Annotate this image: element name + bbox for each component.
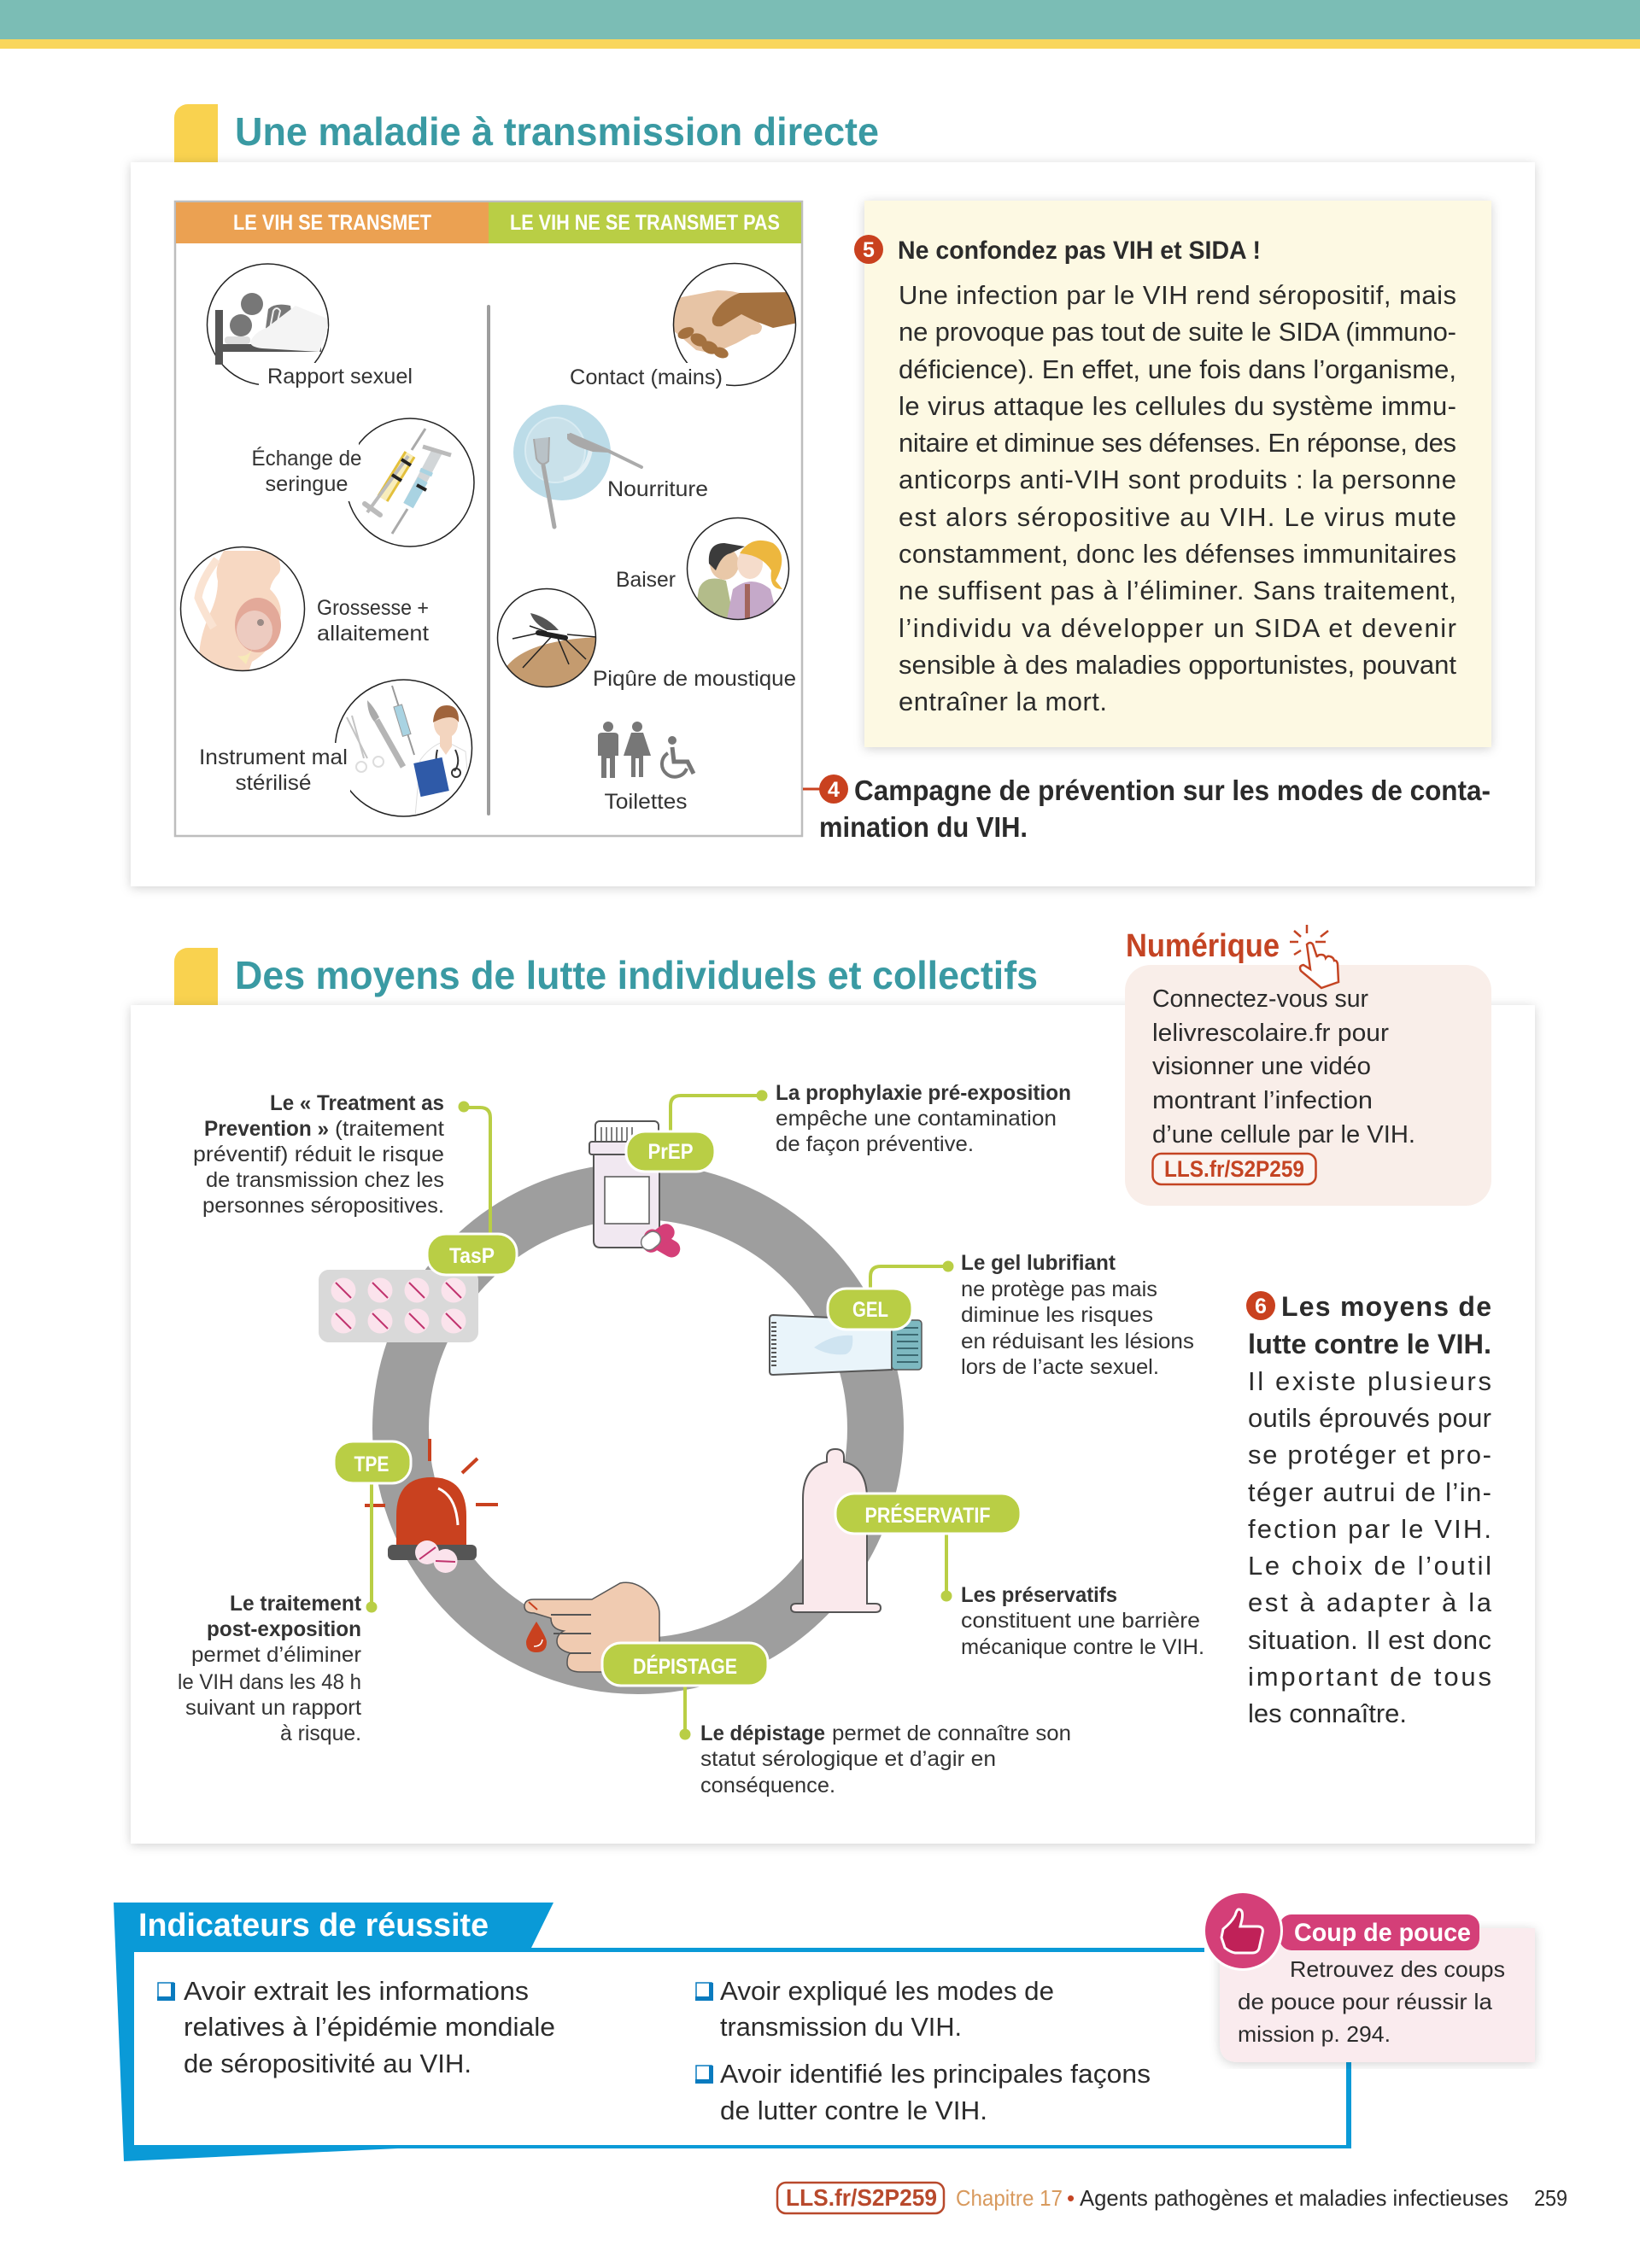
numérique text: montrant l’infection — [1152, 1087, 1373, 1114]
text: Treatment as Prevention: Le « Treatment as — [270, 1091, 444, 1115]
caption: document 4: 4 — [828, 778, 840, 802]
coup de pouce text: mission p. 294. — [1238, 2021, 1391, 2047]
icon: gyrophare TPE — [365, 1439, 498, 1573]
text: Treatment as Prevention — [193, 1091, 444, 1218]
caption: document 4 — [803, 775, 1491, 843]
item: échange de seringue: seringue — [265, 472, 348, 496]
icon: pouce levé — [1203, 1891, 1283, 1971]
checklist: colonne droite: transmission du VIH. — [720, 2012, 962, 2042]
section tab: moyens de lutte — [174, 948, 218, 1006]
text: traitement post-exposition: à risque. — [280, 1721, 361, 1745]
caption: document 4: Campagne de prévention sur les modes de conta- — [854, 775, 1491, 806]
section tab: transmission — [174, 104, 218, 162]
checklist: colonne droite: de lutter contre le VIH. — [720, 2096, 987, 2125]
icon: tube de gel — [770, 1315, 922, 1375]
callout body text: le virus attaque les cellules du système immu- — [899, 391, 1456, 421]
column header: le VIH se transmet: LE VIH SE TRANSMET — [233, 211, 431, 235]
numérique text: lelivrescolaire.fr pour — [1152, 1020, 1389, 1047]
text: traitement post-exposition: le VIH dans les 48 h — [178, 1670, 361, 1694]
icon: flacon PrEP — [589, 1121, 683, 1260]
text: gel lubrifiant: diminue les risques — [961, 1303, 1153, 1327]
heading: Numérique: Numérique — [1126, 928, 1280, 964]
text: Treatment as Prevention: de transmission chez les — [206, 1168, 444, 1192]
item: rapport sexuel: Rapport sexuel — [267, 365, 413, 389]
numérique text: Connectez-vous sur — [1152, 985, 1368, 1013]
text: prophylaxie pré-exposition: La prophylaxie pré-exposition — [776, 1081, 1071, 1105]
text: gel lubrifiant: lors de l’acte sexuel. — [961, 1355, 1159, 1379]
callout body text: l’individu va développer un SIDA et devenir — [899, 613, 1456, 643]
caption: document 6: téger autrui de l’in- — [1248, 1477, 1491, 1507]
callout: coup de pouce — [1203, 1891, 1535, 2062]
item: échange de seringue — [248, 418, 474, 547]
footer: • — [1067, 2185, 1075, 2211]
checklist: colonne droite — [695, 1976, 1151, 2125]
coup de pouce text — [1238, 1956, 1505, 2047]
text: prophylaxie pré-exposition — [776, 1081, 1071, 1156]
label: DÉPISTAGE: DÉPISTAGE — [633, 1654, 737, 1679]
callout body text: entraîner la mort. — [899, 687, 1107, 716]
label: PrEP — [626, 1090, 767, 1172]
callout body text: anticorps anti-VIH sont produits : la personne — [899, 465, 1456, 494]
checklist: colonne gauche — [157, 1976, 555, 2078]
callout: ne confondez pas VIH et SIDA — [854, 201, 1491, 747]
item: contact mains: Contact (mains) — [570, 365, 723, 389]
caption: document 6: se protéger et pro- — [1248, 1440, 1491, 1470]
footer: LLS.fr/S2P259 — [786, 2184, 937, 2211]
coup de pouce text: de pouce pour réussir la — [1238, 1989, 1493, 2014]
label: TasP: TasP — [449, 1244, 495, 1268]
caption: document 4: mination du VIH. — [819, 811, 1028, 843]
label: TPE: TPE — [354, 1453, 390, 1476]
footer — [777, 2183, 1567, 2213]
icon: plaquette de comprimés — [319, 1270, 478, 1342]
text: Treatment as Prevention: (traitement — [335, 1117, 444, 1141]
ring diagram — [319, 1090, 1021, 1740]
column header: le VIH se transmet — [176, 202, 489, 243]
label: TasP — [427, 1102, 517, 1275]
item: rapport sexuel — [207, 264, 421, 390]
text: traitement post-exposition: permet d’éliminer — [191, 1643, 361, 1667]
label pill: Coup de pouce — [1294, 1919, 1471, 1947]
text: gel lubrifiant: en réduisant les lésions — [961, 1330, 1194, 1353]
link badge: LLS.fr/S2P259 — [1164, 1156, 1304, 1182]
callout heading: Ne confondez pas VIH et SIDA ! — [898, 237, 1261, 265]
caption: document 6: Les moyens de — [1281, 1291, 1491, 1322]
numérique text: d’une cellule par le VIH. — [1152, 1121, 1415, 1149]
label: GEL — [828, 1260, 953, 1330]
numérique text: visionner une vidéo — [1152, 1053, 1371, 1080]
caption: document 6: Le choix de l’outil — [1248, 1551, 1491, 1581]
text: dépistage: conséquence. — [700, 1774, 835, 1797]
callout body text: déficience). En effet, une fois dans l’organisme, — [899, 354, 1456, 384]
caption: document 6: situation. Il est donc — [1248, 1625, 1491, 1655]
footer: Agents pathogènes et maladies infectieuses — [1080, 2185, 1508, 2211]
text: dépistage: statut sérologique et d’agir en — [700, 1747, 996, 1771]
callout body text: ne suffisent pas à l’éliminer. Sans traitement, — [899, 576, 1456, 605]
coup de pouce text: Retrouvez des coups — [1290, 1956, 1505, 1982]
text: dépistage: permet de connaître son — [832, 1721, 1071, 1745]
item: toilettes — [598, 722, 694, 814]
item: piqûre de moustique: Piqûre de moustique — [593, 667, 796, 691]
label: PRÉSERVATIF — [835, 1493, 1021, 1602]
item: instrument mal stérilisé: Instrument mal — [199, 745, 348, 769]
item: instrument mal stérilisé — [196, 680, 472, 816]
checklist: colonne droite: Avoir identifié les principales façons — [720, 2059, 1151, 2089]
checklist: colonne droite: Avoir expliqué les modes de — [720, 1976, 1054, 2006]
text: gel lubrifiant: Le gel lubrifiant — [961, 1251, 1116, 1275]
label: GEL: GEL — [852, 1298, 888, 1322]
text: traitement post-exposition: post-exposition — [207, 1617, 361, 1641]
item: toilettes: Toilettes — [605, 790, 687, 814]
icon: main et goutte de sang — [524, 1582, 659, 1672]
label: TPE — [334, 1441, 411, 1612]
text: dépistage — [700, 1721, 1071, 1797]
panel: indicateurs de réussite — [114, 1903, 1351, 2161]
text: traitement post-exposition — [178, 1592, 362, 1745]
item: baiser: Baiser — [616, 568, 676, 592]
numérique text — [1152, 985, 1415, 1149]
text: gel lubrifiant: ne protège pas mais — [961, 1277, 1157, 1301]
text: Treatment as Prevention: Prevention » — [204, 1117, 329, 1141]
heading: Une maladie à transmission directe: Une maladie à transmission directe — [235, 109, 879, 154]
callout: Numérique — [1125, 925, 1491, 1206]
caption: document 6: 6 — [1255, 1295, 1267, 1318]
column header: le VIH ne se transmet pas: LE VIH NE SE TRANSMET PAS — [510, 211, 780, 235]
footer: Chapitre 17 — [956, 2185, 1063, 2211]
item: contact mains — [564, 263, 798, 390]
item: baiser — [616, 517, 789, 623]
item: échange de seringue: Échange de — [251, 446, 362, 471]
caption: document 6: est à adapter à la — [1248, 1587, 1492, 1617]
text: préservatifs: constituent une barrière — [961, 1609, 1200, 1633]
caption: document 6: Il existe plusieurs — [1248, 1366, 1491, 1396]
text: traitement post-exposition: Le traitement — [230, 1592, 362, 1616]
text: dépistage: Le dépistage — [700, 1721, 825, 1745]
caption: document 6: les connaître. — [1248, 1698, 1407, 1728]
caption: document 6: outils éprouvés pour — [1248, 1403, 1491, 1433]
item: nourriture: Nourriture — [607, 477, 708, 501]
callout body text: nitaire et diminue ses défenses. En réponse, des — [899, 428, 1456, 458]
label: PrEP: PrEP — [647, 1140, 694, 1164]
heading: indicateurs: Indicateurs de réussite — [138, 1908, 489, 1944]
text: préservatifs: mécanique contre le VIH. — [961, 1635, 1204, 1659]
item: instrument mal stérilisé: stérilisé — [236, 771, 311, 795]
text: prophylaxie pré-exposition: empêche une contamination — [776, 1107, 1057, 1131]
heading: Des moyens de lutte: Des moyens de lutte individuels et collectifs — [235, 953, 1038, 997]
checklist: colonne gauche: de séropositivité au VIH. — [184, 2049, 472, 2078]
caption: document 6: important de tous — [1248, 1662, 1491, 1692]
icon: main qui clique — [1290, 925, 1338, 988]
number badge 5 — [854, 235, 883, 264]
item: grossesse et allaitement — [181, 547, 429, 675]
item: grossesse et allaitement: allaitement — [317, 622, 429, 646]
item: nourriture — [513, 405, 708, 527]
label: DÉPISTAGE — [602, 1643, 768, 1740]
column header: le VIH ne se transmet pas — [489, 202, 801, 243]
label: PRÉSERVATIF: PRÉSERVATIF — [864, 1503, 991, 1528]
item: piqûre de moustique — [495, 589, 796, 692]
footer: 259 — [1534, 2185, 1567, 2211]
text: préservatifs: Les préservatifs — [961, 1583, 1117, 1607]
panel: moyens de lutte — [131, 1005, 1535, 1844]
callout body text: Une infection par le VIH rend séropositif, mais — [899, 280, 1456, 310]
callout body text — [899, 280, 1456, 716]
icon: préservatif — [791, 1449, 881, 1612]
text: préservatifs — [961, 1583, 1204, 1659]
checklist: colonne gauche: Avoir extrait les informations — [184, 1976, 529, 2006]
text: traitement post-exposition: suivant un rapport — [185, 1696, 361, 1720]
text: prophylaxie pré-exposition: de façon préventive. — [776, 1132, 974, 1156]
callout body text: sensible à des maladies opportunistes, pouvant — [899, 650, 1456, 680]
number badge 5: 5 — [863, 238, 875, 262]
table: modes de contamination — [175, 202, 802, 836]
callout body text: constamment, donc les défenses immunitaires — [899, 539, 1456, 569]
item: grossesse et allaitement: Grossesse + — [317, 596, 429, 620]
caption: document 6: fection par le VIH. — [1248, 1514, 1491, 1544]
callout body text: est alors séropositive au VIH. Le virus mute — [899, 502, 1456, 532]
caption: document 6: lutte contre le VIH. — [1248, 1329, 1491, 1359]
caption: document 6 — [1246, 1291, 1492, 1728]
checklist: colonne gauche: relatives à l’épidémie mondiale — [184, 2012, 555, 2042]
top colour band — [0, 0, 1640, 49]
text: Treatment as Prevention: personnes séropositives. — [202, 1194, 444, 1218]
callout body text: ne provoque pas tout de suite le SIDA (immuno- — [899, 317, 1456, 347]
text: Treatment as Prevention: préventif) réduit le risque — [193, 1143, 444, 1166]
text: gel lubrifiant — [961, 1251, 1194, 1379]
